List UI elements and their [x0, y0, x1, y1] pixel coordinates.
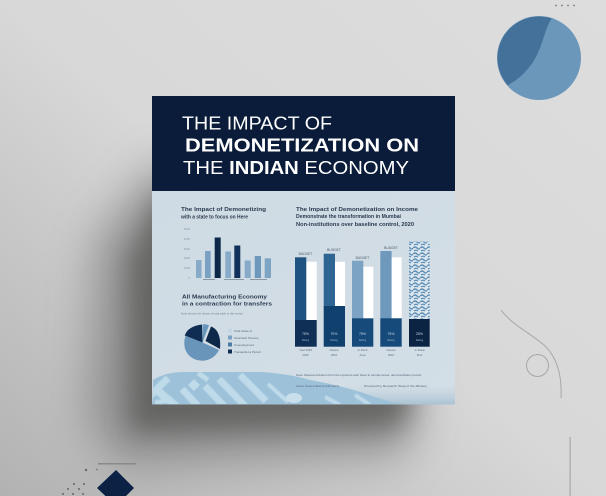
column 2: Rating	[330, 339, 338, 342]
column labels: 2016	[331, 353, 338, 357]
category labels	[203, 279, 215, 280]
column 5: Rating	[416, 339, 424, 342]
stacked bar chart	[295, 242, 430, 357]
column labels: In Rural	[415, 348, 425, 352]
decorative vertical line: bottom right	[570, 437, 571, 496]
axis labels: 2000	[184, 256, 190, 260]
poster	[150, 96, 455, 407]
bars	[196, 260, 202, 278]
column labels: Post	[417, 353, 423, 357]
pie chart	[184, 324, 220, 361]
pie legend	[228, 328, 261, 354]
pie legend: Transactions Period	[234, 350, 261, 354]
footnotes	[296, 373, 427, 388]
bar chart	[184, 227, 271, 280]
decorative line: bottom left	[98, 463, 136, 464]
column 3: 75%	[359, 332, 366, 336]
left heading: pie chart: All Manufacturing Economy	[182, 294, 268, 300]
pie legend: Structural Themes	[234, 336, 259, 340]
header band	[152, 96, 455, 191]
column labels: Year 2018	[299, 348, 312, 352]
column 1	[295, 252, 317, 347]
pie legend: Total share of	[234, 329, 252, 333]
footnotes: Prepared by Research Wing of the Ministry	[364, 384, 427, 388]
column labels: In Rural	[358, 348, 368, 352]
left heading: bar chart: The Impact of Demonetizing	[181, 207, 267, 213]
column 4: 75%	[387, 332, 395, 336]
decorative curve and ring: right	[501, 310, 561, 398]
axis labels: 5000	[184, 227, 190, 231]
column 2	[324, 248, 345, 347]
column 4: BUDGET	[384, 246, 398, 250]
poster drop shadow	[88, 160, 418, 465]
column 5	[409, 242, 430, 347]
footnotes: Source: Reserve Bank of India reports	[296, 384, 339, 388]
decorative circle: top right	[497, 16, 581, 100]
left heading: pie chart: in a contraction for transfers	[182, 302, 272, 308]
pie caption: Note shows the share of total cash in the sector	[181, 312, 243, 316]
footer pattern	[153, 372, 400, 404]
axis labels	[184, 227, 190, 280]
column labels: 2016	[302, 353, 309, 357]
title: THE INDIAN ECONOMY	[183, 157, 410, 178]
right heading: The Impact of Demonetization on Income	[296, 207, 418, 213]
column 2: 70%	[330, 332, 338, 336]
column labels: Volume	[329, 348, 339, 352]
right heading: Demonstrate the transformation in Mumbai	[296, 214, 401, 220]
decorative dots: bottom left	[62, 469, 98, 495]
column 2: BUDGET	[327, 248, 341, 252]
column 4	[380, 246, 402, 347]
column 1: Rating	[302, 339, 310, 342]
column 5: 25%	[416, 332, 423, 336]
decorative diamond: bottom left	[97, 470, 134, 496]
column labels: 2016	[388, 353, 395, 357]
axis labels: 1000	[184, 266, 190, 270]
left heading: bar chart	[180, 207, 267, 220]
axis labels: 0	[188, 276, 190, 280]
title: THE IMPACT OF	[182, 114, 332, 134]
column labels: Volume	[386, 348, 396, 352]
panel body	[152, 190, 455, 404]
column 3: Rating	[359, 339, 367, 342]
axis labels: 4000	[184, 237, 190, 241]
column 1: 75%	[302, 332, 309, 336]
right heading: Non-institutions over baseline control, 2020	[296, 222, 414, 228]
left heading: bar chart: with a state to focus on Here	[180, 214, 248, 220]
column 3	[352, 256, 373, 347]
column 4: Rating	[387, 339, 395, 342]
right heading	[296, 207, 418, 228]
left heading: pie chart	[182, 294, 272, 308]
footnotes: Note: Measured data is from the reported cash flows in sample areas, demonetization period	[296, 373, 421, 377]
column labels: Area	[360, 353, 366, 357]
decorative dots: top right	[555, 5, 575, 6]
title: DEMONETIZATION ON	[185, 135, 419, 156]
column labels	[299, 348, 425, 357]
column 1: BUDGET	[299, 252, 312, 256]
title	[182, 114, 419, 178]
axis labels: 3000	[184, 247, 190, 251]
pie legend: Unemployment	[234, 343, 254, 347]
column 3: BUDGET	[356, 256, 369, 260]
